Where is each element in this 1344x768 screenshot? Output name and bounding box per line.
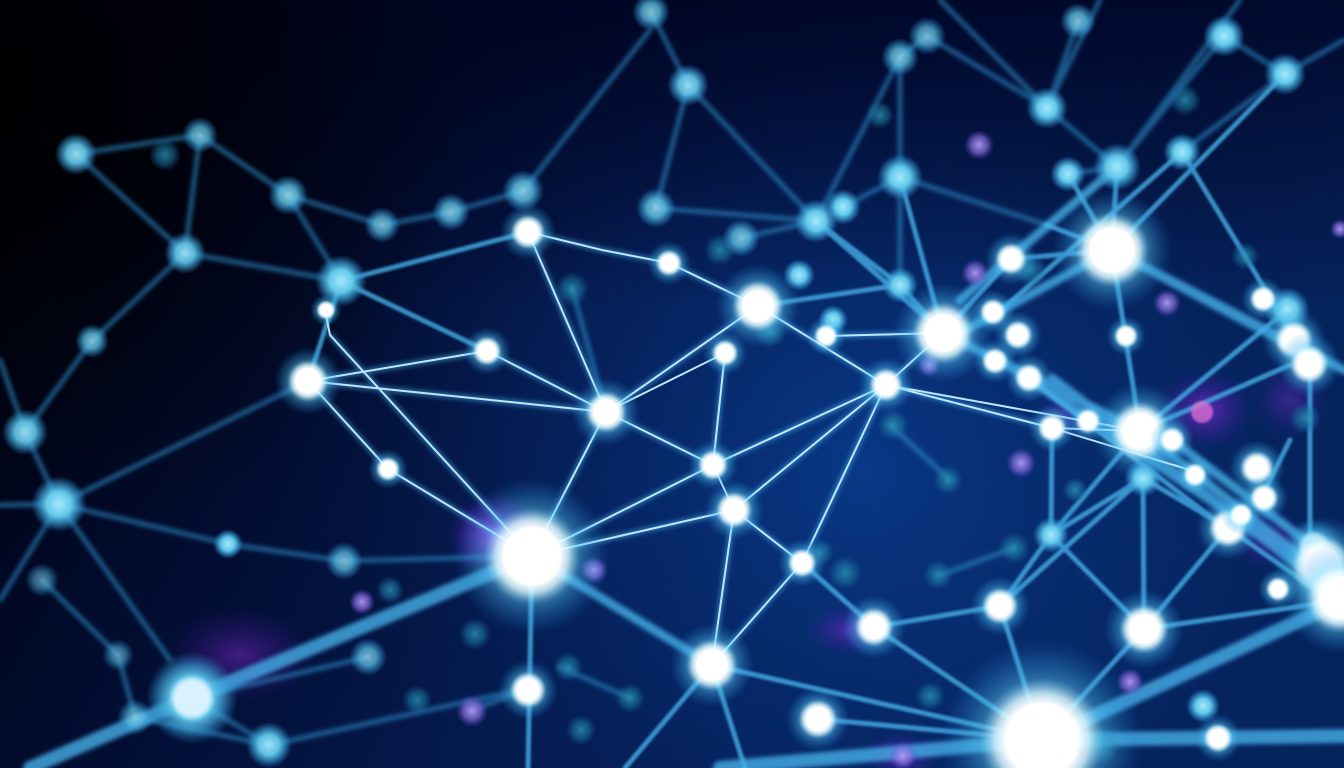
soft glow under thin links [308,232,1052,665]
dim out-of-focus nodes [149,84,1321,765]
thin bright links [308,232,1190,665]
purple light haze [165,360,1330,768]
violet accent nodes [349,130,1344,768]
bright glowing nodes [146,190,1344,768]
